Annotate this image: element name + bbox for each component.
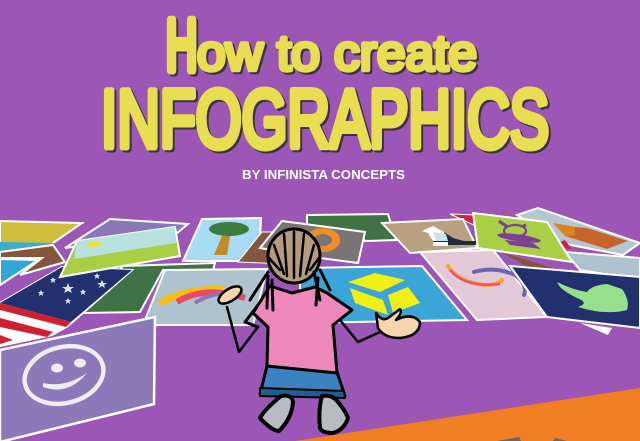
bird icon [557,282,628,312]
pigtails [245,270,330,327]
card: cube [300,266,467,323]
footer peeking icons [497,437,567,441]
cube icon [348,273,420,315]
skirt [260,366,345,398]
card: green back [307,214,396,241]
flag stars [38,273,107,304]
card: tree [183,218,261,261]
card: brown [0,245,65,275]
card: magic hat [473,213,572,262]
card: landscape [60,227,180,277]
card: flag [0,267,132,346]
card: purple back [65,219,188,248]
title: How to create: H [166,5,197,86]
card: grey with orange target [260,221,365,263]
card: rainbow [143,269,267,325]
orange footer band [295,388,640,441]
hair [268,229,320,283]
right arm and hand [340,309,420,342]
card: red peek [450,214,476,226]
hat icon [497,221,541,249]
card: swirl [420,250,547,320]
title: How to create [166,5,477,86]
title: How to create: ow to create [197,25,477,81]
card: smiley [0,317,155,441]
hair strands [269,232,319,278]
left arm and hand [216,283,257,352]
card: grey blue right [565,252,640,280]
card: house arrow [517,208,640,255]
card: blue left [0,259,38,285]
card: dark green [82,263,215,313]
girl figure [216,229,420,433]
card: brown peek right [500,252,553,268]
shirt [253,286,352,373]
card: chess [382,219,477,253]
subtitle: BY INFINISTA CONCEPTS [242,167,405,182]
shoes [260,396,348,433]
card: twitter [510,266,640,335]
card: yellow and blue [0,221,82,252]
card: brown behind head [238,232,285,264]
